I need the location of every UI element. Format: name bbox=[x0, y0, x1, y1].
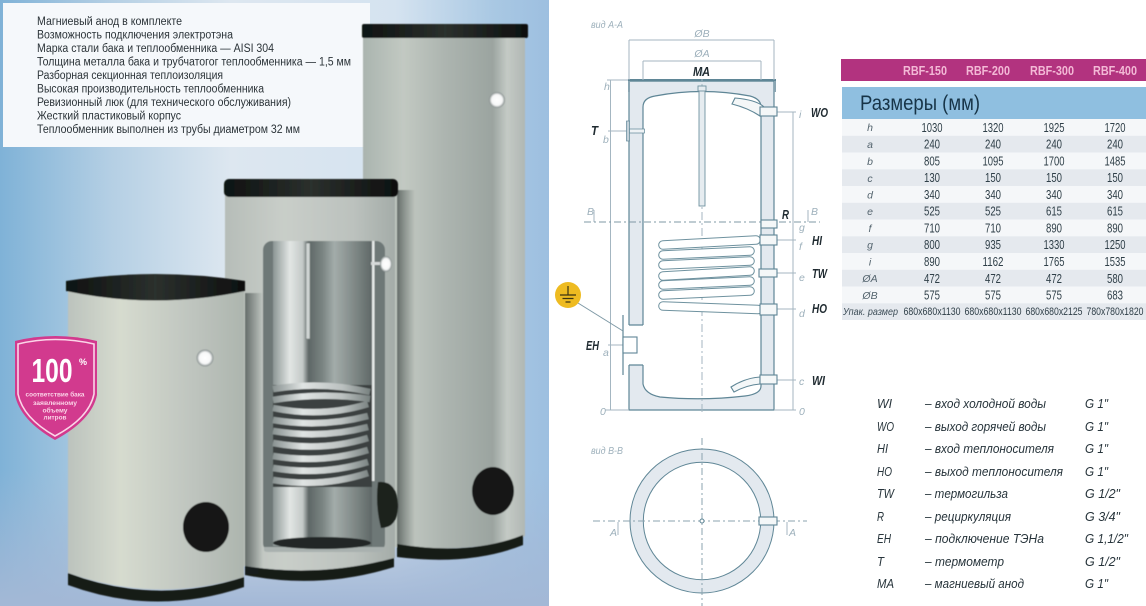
table header: models: RBF-150 bbox=[903, 63, 947, 78]
row diameter B: 575 bbox=[924, 288, 940, 302]
features list: Ревизионный люк (для технического обслуживания) bbox=[37, 97, 291, 109]
row c bbox=[867, 170, 1123, 185]
legend T: T bbox=[877, 554, 885, 569]
row diameter B: 683 bbox=[1107, 288, 1123, 302]
row f: 710 bbox=[924, 220, 940, 236]
axis lines bbox=[593, 438, 807, 606]
fittings bbox=[731, 98, 777, 392]
legend R bbox=[877, 509, 1121, 524]
row diameter A: 472 bbox=[985, 271, 1001, 286]
dimension labels: d bbox=[799, 308, 806, 320]
row c: 150 bbox=[985, 170, 1001, 185]
row e: 525 bbox=[924, 204, 940, 218]
row b bbox=[867, 154, 1126, 168]
badge caption: заявленному bbox=[33, 400, 77, 407]
legend TW: – термогильза bbox=[924, 486, 1008, 501]
table title: Размеры (мм) bbox=[860, 92, 980, 115]
row b: 1700 bbox=[1044, 154, 1064, 168]
row diameter B: 575 bbox=[985, 288, 1001, 302]
row i: 1535 bbox=[1104, 254, 1126, 269]
badge number: 100 bbox=[32, 352, 72, 389]
row diameter A: ØA bbox=[861, 273, 878, 285]
connection labels: WO bbox=[811, 105, 828, 120]
row diameter B bbox=[861, 288, 1123, 302]
row e: e bbox=[867, 206, 873, 218]
row b: b bbox=[867, 156, 873, 168]
table: dimensions bbox=[841, 59, 1146, 320]
dimension labels: b bbox=[603, 134, 609, 146]
heater flange bbox=[377, 482, 398, 528]
ring centre bbox=[700, 519, 704, 523]
legend EH: – подключение ТЭНа bbox=[924, 531, 1044, 546]
row g: 935 bbox=[985, 237, 1001, 252]
legend MA: G 1" bbox=[1085, 576, 1109, 591]
legend HI: – вход теплоносителя bbox=[924, 441, 1054, 456]
legend HO: G 1" bbox=[1085, 464, 1109, 479]
thermometer fitting bbox=[626, 121, 644, 141]
row f bbox=[869, 220, 1123, 236]
row package size: 680x680x1130 bbox=[904, 306, 960, 318]
row i: 890 bbox=[924, 254, 940, 269]
table title bbox=[842, 87, 1146, 119]
magnesium anode bbox=[698, 86, 706, 206]
features panel bbox=[3, 3, 370, 147]
row i: 1162 bbox=[982, 254, 1004, 269]
row c: 150 bbox=[1046, 170, 1062, 185]
row diameter A: 472 bbox=[1046, 271, 1062, 286]
section marks bbox=[609, 522, 796, 539]
table header: models: RBF-300 bbox=[1030, 63, 1074, 78]
legend TW: TW bbox=[877, 486, 895, 501]
legend EH bbox=[877, 531, 1129, 546]
row d: 340 bbox=[985, 187, 1001, 202]
legend T: G 1/2" bbox=[1085, 554, 1121, 569]
row f: 710 bbox=[985, 220, 1001, 236]
dimension lines bbox=[584, 40, 820, 415]
row b: 1095 bbox=[982, 154, 1004, 168]
legend R: R bbox=[877, 509, 884, 524]
legend WO: – выход горячей воды bbox=[924, 419, 1046, 434]
row d: d bbox=[867, 190, 874, 202]
row diameter A: 580 bbox=[1107, 271, 1123, 286]
badge caption bbox=[26, 390, 85, 422]
row g: 1330 bbox=[1044, 237, 1064, 252]
row a bbox=[867, 136, 1123, 152]
section marks: A bbox=[609, 527, 617, 539]
connection labels bbox=[586, 64, 828, 388]
dimension labels: B bbox=[811, 206, 818, 218]
row b: 1485 bbox=[1104, 154, 1126, 168]
table header: models: RBF-400 bbox=[1093, 63, 1137, 78]
features list bbox=[37, 16, 351, 136]
row package size: Упак. размер bbox=[842, 306, 898, 318]
dimension labels: e bbox=[799, 272, 805, 284]
view title A-A: вид А-А bbox=[591, 19, 623, 31]
dimension labels: ØA bbox=[693, 48, 710, 60]
dimension labels: h bbox=[604, 81, 610, 93]
legend HO: – выход теплоносителя bbox=[924, 464, 1063, 479]
dimension labels: a bbox=[603, 347, 609, 359]
row a: 240 bbox=[1107, 136, 1123, 152]
anode rod bbox=[306, 243, 310, 339]
badge caption: соответствие бака bbox=[26, 390, 85, 398]
row c: c bbox=[867, 173, 873, 185]
connection labels: TW bbox=[812, 266, 828, 281]
legend WO bbox=[877, 419, 1109, 434]
table header: models bbox=[841, 59, 1146, 81]
row g: 800 bbox=[924, 237, 940, 252]
row b: 805 bbox=[924, 154, 940, 168]
badge caption: объему bbox=[42, 406, 68, 414]
connection labels: HO bbox=[812, 301, 827, 316]
row g bbox=[867, 237, 1126, 252]
legend HO: HO bbox=[877, 464, 892, 479]
row package size: 680x680x1130 bbox=[964, 306, 1022, 318]
badge: 100% shield bbox=[15, 336, 97, 440]
dimension labels: g bbox=[799, 222, 805, 234]
dimension labels: ØB bbox=[693, 28, 710, 40]
legend T bbox=[877, 554, 1121, 569]
row e: 615 bbox=[1046, 204, 1062, 218]
tank walls bbox=[628, 81, 774, 410]
row d: 340 bbox=[1046, 187, 1062, 202]
row e: 615 bbox=[1107, 204, 1123, 218]
legend HI: HI bbox=[877, 441, 888, 456]
features list: Высокая производительность теплообменника bbox=[37, 84, 265, 96]
connection labels: R bbox=[782, 207, 789, 222]
legend WO: WO bbox=[877, 419, 894, 434]
ring fitting bbox=[759, 517, 777, 525]
row a: 240 bbox=[1046, 136, 1062, 152]
row h: 1320 bbox=[982, 120, 1004, 135]
dimension labels: 0 bbox=[600, 406, 606, 418]
view title B-B: вид В-В bbox=[591, 445, 623, 457]
row c: 130 bbox=[924, 170, 940, 185]
legend: connections bbox=[877, 396, 1129, 591]
row h: 1720 bbox=[1104, 120, 1126, 135]
connection labels: HI bbox=[812, 233, 822, 248]
row a: 240 bbox=[924, 136, 940, 152]
legend TW bbox=[877, 486, 1121, 501]
row c: 150 bbox=[1107, 170, 1123, 185]
features list: Жесткий пластиковый корпус bbox=[37, 110, 181, 122]
dimension labels: i bbox=[799, 109, 802, 121]
features list: Теплообменник выполнен из трубы диаметром 32 мм bbox=[37, 124, 300, 136]
legend R: G 3/4" bbox=[1085, 509, 1121, 524]
row f: 890 bbox=[1107, 220, 1123, 236]
legend MA: – магниевый анод bbox=[924, 576, 1024, 591]
dimension labels: 0 bbox=[799, 406, 805, 418]
legend HI bbox=[877, 441, 1109, 456]
top cover bbox=[628, 79, 776, 92]
connection labels: T bbox=[591, 123, 599, 138]
ring bbox=[630, 449, 774, 593]
row i: 1765 bbox=[1044, 254, 1064, 269]
legend WI: WI bbox=[877, 396, 892, 411]
cutaway opening bbox=[263, 241, 385, 552]
row d: 340 bbox=[924, 187, 940, 202]
table header: models: RBF-200 bbox=[966, 63, 1010, 78]
row h: 1925 bbox=[1044, 120, 1064, 135]
thermometer knob bbox=[371, 256, 392, 272]
heat exchanger coil bbox=[273, 386, 370, 483]
dimension labels bbox=[587, 28, 818, 418]
row a: 240 bbox=[985, 136, 1001, 152]
row a: a bbox=[867, 139, 873, 151]
tank: small RBF-150 bbox=[66, 274, 245, 602]
features list: Магниевый анод в комплекте bbox=[37, 16, 182, 28]
badge percent: % bbox=[79, 357, 87, 367]
row e: 525 bbox=[985, 204, 1001, 218]
diagram: section A-A bbox=[555, 19, 828, 418]
table row stripes bbox=[842, 119, 1146, 320]
legend HO bbox=[877, 464, 1109, 479]
row h bbox=[867, 120, 1126, 135]
row e bbox=[867, 204, 1123, 218]
heater port EH bbox=[623, 315, 637, 375]
connection labels: WI bbox=[812, 373, 825, 388]
section marks: A bbox=[788, 527, 796, 539]
row h: h bbox=[867, 122, 873, 134]
legend MA bbox=[877, 576, 1109, 591]
row diameter B: ØB bbox=[861, 290, 878, 302]
features list: Марка стали бака и теплообменника — AISI 304 bbox=[37, 43, 275, 55]
row g: g bbox=[867, 240, 873, 252]
white diagram background bbox=[549, 0, 1146, 606]
features list: Возможность подключения электротэна bbox=[37, 30, 234, 42]
legend T: – термометр bbox=[924, 554, 1004, 569]
photo background panel bbox=[0, 0, 549, 606]
dimension labels: B bbox=[587, 206, 594, 218]
row diameter B: 575 bbox=[1046, 288, 1062, 302]
row d: 340 bbox=[1107, 187, 1123, 202]
legend TW: G 1/2" bbox=[1085, 486, 1121, 501]
features list: Толщина металла бака и трубчатогог теплообменника — 1,5 мм bbox=[37, 56, 351, 68]
tank: large RBF-400 bbox=[362, 24, 528, 560]
legend WO: G 1" bbox=[1085, 419, 1109, 434]
legend MA: MA bbox=[877, 576, 894, 591]
row diameter A: 472 bbox=[924, 271, 940, 286]
row f: f bbox=[869, 223, 873, 235]
row h: 1030 bbox=[922, 120, 942, 135]
row g: 1250 bbox=[1104, 237, 1126, 252]
legend EH: G 1,1/2" bbox=[1085, 531, 1129, 546]
badge caption: литров bbox=[44, 414, 66, 422]
row d bbox=[867, 187, 1123, 202]
row i bbox=[869, 254, 1126, 269]
legend R: – рециркуляция bbox=[924, 509, 1011, 524]
legend HI: G 1" bbox=[1085, 441, 1109, 456]
features list: Разборная секционная теплоизоляция bbox=[37, 70, 223, 82]
connection labels: EH bbox=[586, 338, 599, 353]
tank: middle cutaway bbox=[224, 179, 398, 581]
legend WI: G 1" bbox=[1085, 396, 1109, 411]
row i: i bbox=[869, 256, 872, 268]
connection labels: MA bbox=[693, 64, 710, 79]
dimension labels: f bbox=[799, 241, 803, 253]
coil bbox=[663, 240, 758, 310]
shadow from small tank bbox=[245, 293, 263, 574]
row diameter A bbox=[861, 271, 1123, 286]
legend EH: EH bbox=[877, 531, 891, 546]
row package size: 680x680x2125 bbox=[1026, 306, 1082, 318]
dimension labels: c bbox=[799, 376, 805, 388]
legend WI: – вход холодной воды bbox=[924, 396, 1046, 411]
diagram: section B-B bbox=[591, 438, 807, 606]
legend WI bbox=[877, 396, 1109, 411]
row package size bbox=[842, 306, 1144, 318]
icon: grounding bbox=[555, 282, 623, 331]
row f: 890 bbox=[1046, 220, 1062, 236]
